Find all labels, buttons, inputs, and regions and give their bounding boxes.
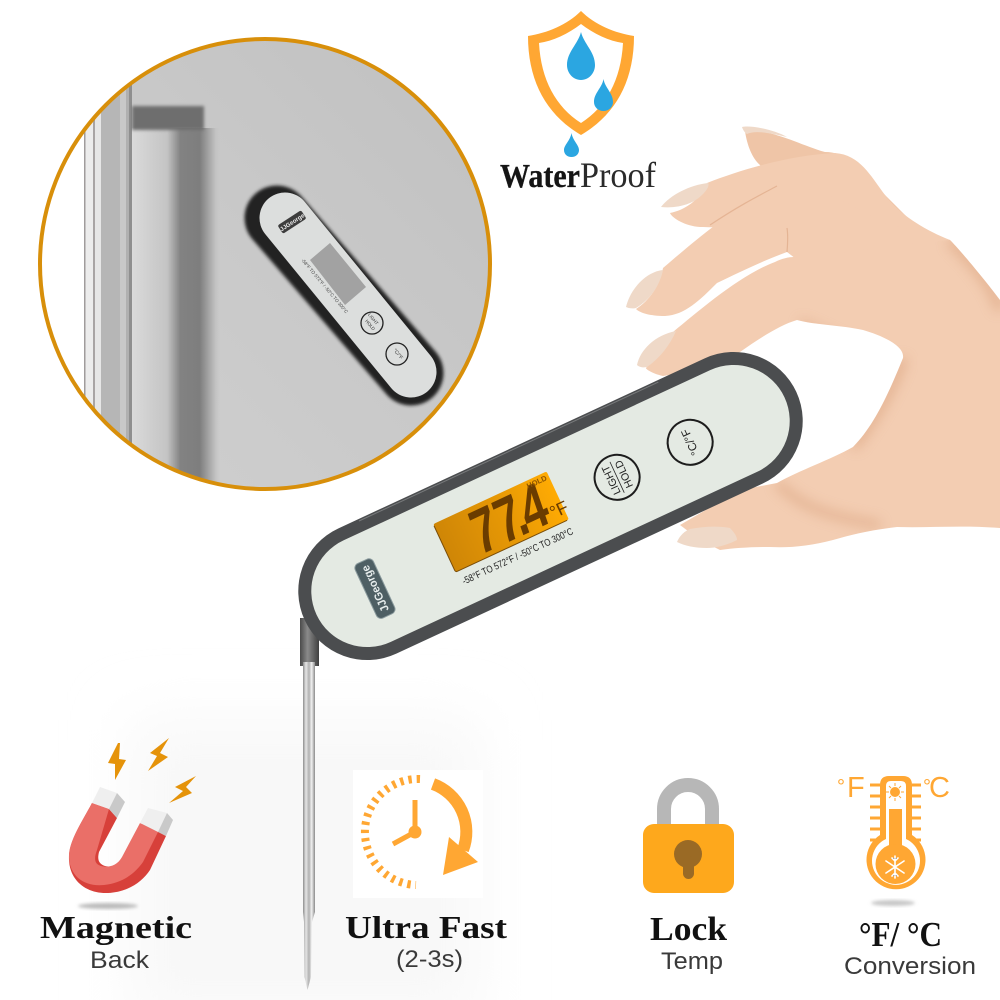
heading: WaterProof: Proof — [580, 155, 656, 195]
temperature reading: 77.4 — [461, 468, 557, 568]
hand — [626, 127, 1000, 550]
unit: °F — [547, 497, 571, 523]
case — [339, 360, 734, 591]
background haze — [130, 720, 480, 1000]
heading: WaterProof — [500, 155, 656, 195]
icon: padlock — [643, 785, 734, 893]
label: C scale: ° — [923, 776, 931, 798]
label: Temp: Temp — [661, 948, 723, 975]
mini logo badge: JJGeorge — [279, 213, 307, 233]
ring finger — [670, 153, 950, 260]
mini thermometer on fridge door — [277, 210, 411, 373]
label: Conversion: Conversion — [844, 953, 976, 980]
feature: lock temp — [643, 785, 734, 975]
icon: lightning bolts — [108, 738, 196, 803]
label: F scale: F — [847, 772, 865, 804]
range text: -58°F TO 572°F / -50°C TO 300°C — [461, 526, 575, 587]
waterproof badge — [528, 11, 634, 157]
middle nail — [626, 270, 663, 308]
button: light hold: LIGHT — [599, 463, 624, 496]
hold label: HOLD — [525, 473, 549, 491]
thumb nail — [677, 527, 737, 548]
hand shading — [777, 240, 1000, 525]
mini button unit: °C/°F — [392, 348, 404, 361]
palm, index finger and thumb — [646, 240, 1000, 550]
probe hinge — [300, 618, 319, 666]
panel: magnetic mount photo inset — [38, 38, 492, 490]
decorative handle — [42, 134, 84, 394]
icon: water drops — [564, 32, 613, 157]
LCD display — [430, 462, 576, 580]
feature: unit conversion — [837, 772, 976, 980]
mini button unit — [386, 343, 408, 365]
label: Back: Back — [90, 947, 150, 974]
feature: ultra fast — [345, 770, 507, 973]
label: Ultra Fast: Ultra Fast — [345, 909, 507, 945]
mini button light hold: HOLD — [364, 319, 377, 332]
mini range text: -58°F TO 572°F / -50°C TO 300°C — [300, 258, 349, 315]
mini button light hold: LIGHT — [367, 312, 379, 326]
probe needle — [303, 662, 315, 990]
icon: thermometer — [867, 776, 926, 906]
logo badge — [353, 557, 397, 620]
index nail — [637, 331, 676, 367]
label: Lock: Lock — [650, 911, 727, 948]
mini button light hold — [361, 312, 383, 334]
button: unit switch: °C/°F — [680, 427, 702, 457]
logo badge: JJGeorge — [360, 563, 392, 613]
middle finger — [636, 185, 950, 316]
button: unit switch — [660, 412, 720, 472]
label: Magnetic: Magnetic — [40, 909, 192, 945]
icon: shield — [528, 11, 634, 135]
knuckle creases — [710, 186, 788, 252]
heading: WaterProof: Water — [500, 158, 580, 195]
pinky nail — [742, 127, 787, 137]
thermometer body — [337, 360, 750, 626]
feature: magnetic back — [40, 738, 196, 974]
pinky finger — [745, 131, 915, 230]
button: light hold: HOLD — [613, 458, 636, 490]
label: C scale: C — [929, 772, 950, 804]
label: F scale: ° — [837, 776, 845, 798]
mini LCD — [310, 243, 366, 305]
icon: magnet — [69, 787, 173, 909]
ring nail — [661, 183, 709, 207]
button: light hold — [587, 447, 647, 507]
label: 2-3s: (2-3s) — [396, 946, 463, 973]
label: F / C: °F/ °C — [859, 915, 942, 954]
icon: clock — [353, 770, 483, 898]
